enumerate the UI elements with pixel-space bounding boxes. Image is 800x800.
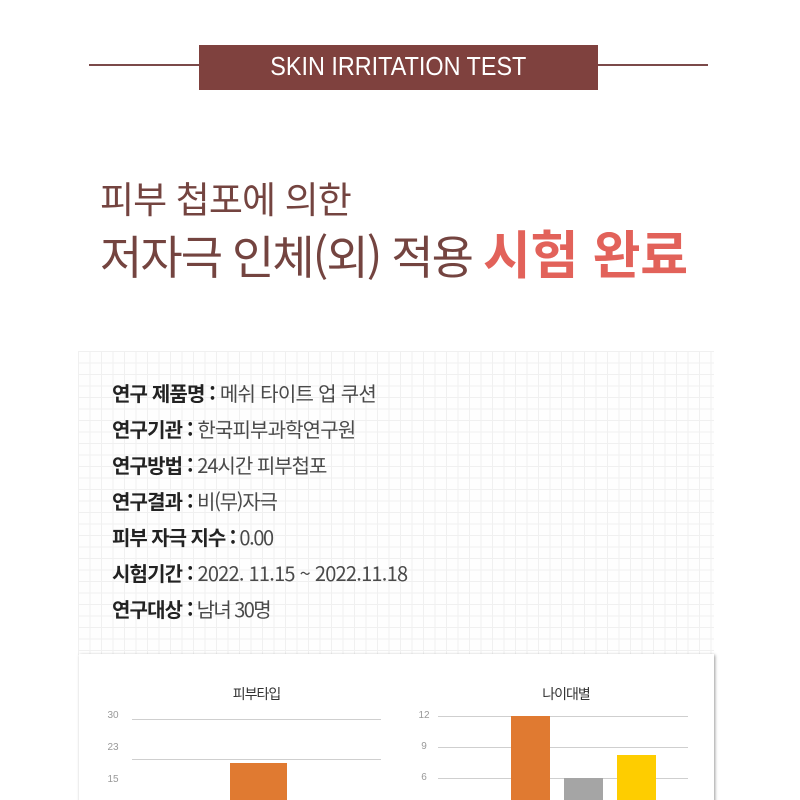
axis label 12: 12 [418, 710, 430, 721]
axis label 6: 6 [421, 772, 427, 783]
heading highlight: 시험 완료 [483, 214, 688, 289]
gray bar [564, 778, 603, 800]
chart: age group [418, 684, 688, 800]
irritation index: 피부 자극 지수 : 0.00 [112, 522, 273, 551]
panel: study details on grid background [78, 351, 714, 655]
bar [230, 763, 287, 800]
axis label 30: 30 [107, 710, 119, 721]
banner title: SKIN IRRITATION TEST [270, 51, 527, 81]
yellow bar [617, 755, 656, 800]
institution: 연구기관 : 한국피부과학연구원 [112, 414, 355, 443]
chart title: 피부타입 [233, 684, 280, 704]
banner title [199, 45, 598, 90]
main heading [100, 170, 688, 289]
test period: 시험기간 : 2022. 11.15 ~ 2022.11.18 [112, 558, 407, 587]
method: 연구방법 : 24시간 피부첩포 [112, 450, 326, 479]
study details text [112, 378, 408, 623]
axis label 23: 23 [107, 742, 119, 753]
result: 연구결과 : 비(무)자극 [112, 486, 277, 515]
panel: charts [79, 654, 714, 800]
axis label 15: 15 [107, 774, 119, 785]
subjects: 연구대상 : 남녀 30명 [112, 594, 270, 623]
axis label 9: 9 [421, 741, 427, 752]
chart: skin type [107, 684, 381, 800]
heading line 2: 저자극 인체(외) 적용 [100, 222, 472, 288]
heading line 1: 피부 첩포에 의한 [100, 170, 351, 224]
product name: 연구 제품명 : 메쉬 타이트 업 쿠션 [112, 378, 376, 407]
chart title: 나이대별 [542, 684, 590, 704]
orange bar [511, 716, 550, 800]
